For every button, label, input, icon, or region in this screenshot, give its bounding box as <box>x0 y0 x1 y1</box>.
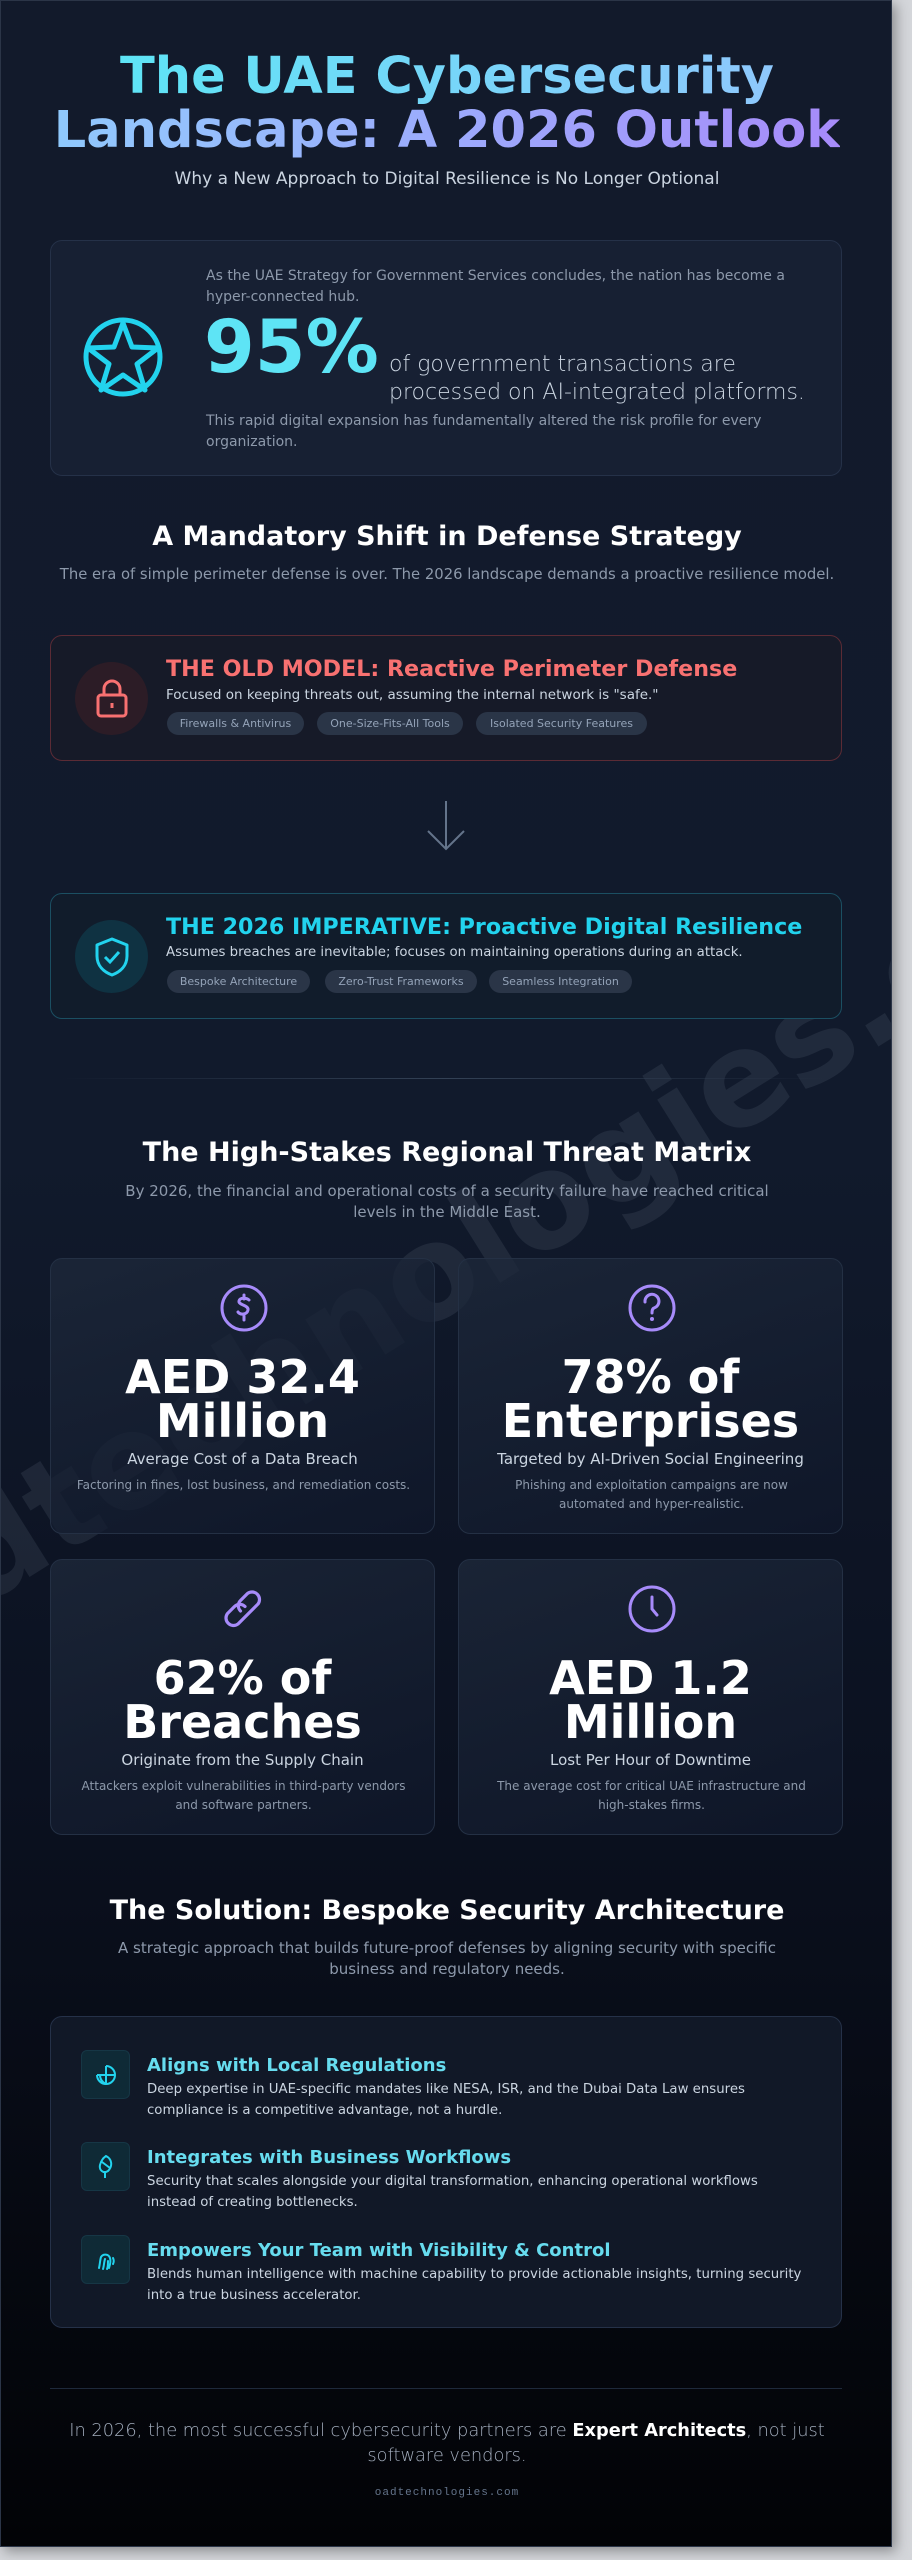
icon: dollar <box>220 1284 268 1332</box>
subheading: A strategic approach that builds future-proof defenses by aligning security with specific business and regulatory needs. <box>118 1939 776 1978</box>
tags: Isolated Security Features <box>490 717 633 730</box>
icon: link <box>224 1590 262 1628</box>
label: Targeted by AI-Driven Social Engineering <box>497 1450 804 1468</box>
old model desc: Focused on keeping threats out, assuming the internal network is "safe." <box>166 687 659 703</box>
item: workflows: Security that scales alongside your digital transformation, enhancing operational workflows instead of creating bottlenecks. <box>147 2174 758 2210</box>
stat description: of government transactions are processed on AI-integrated platforms. <box>389 352 805 405</box>
icon: compliance <box>81 2050 130 2099</box>
heading: threat matrix: The High-Stakes Regional Threat Matrix <box>143 1137 751 1168</box>
heading: solution: The Solution: Bespoke Security Architecture <box>110 1895 784 1926</box>
number: Million <box>564 1695 737 1749</box>
label: Originate from the Supply Chain <box>121 1751 364 1769</box>
panel: 2026 imperative <box>50 893 842 1019</box>
heading: mandatory shift: A Mandatory Shift in Defense Strategy <box>152 521 742 552</box>
stat card: supply chain <box>50 1559 435 1835</box>
footer statement: In 2026, the most successful cybersecurity partners are Expert Architects, not just software vendors. <box>69 2420 825 2466</box>
tags: Seamless Integration <box>502 975 619 988</box>
arrow: down <box>427 801 465 850</box>
title: The UAE Cybersecurity <box>120 47 774 106</box>
tags: One-Size-Fits-All Tools <box>330 717 450 730</box>
old model title: THE OLD MODEL: Reactive Perimeter Defense <box>166 656 737 682</box>
subheading: By 2026, the financial and operational costs of a security failure have reached critical levels in the Middle East. <box>125 1182 769 1221</box>
number: Million <box>156 1394 329 1448</box>
item: regulations: Deep expertise in UAE-specific mandates like NESA, ISR, and the Dubai Data Law ensures compliance is a competitive advantage, not a hurdle. <box>147 2082 745 2118</box>
number: Enterprises <box>502 1394 799 1448</box>
follow text: This rapid digital expansion has fundamentally altered the risk profile for every organization. <box>206 413 761 450</box>
detail: Attackers exploit vulnerabilities in third-party vendors and software partners. <box>82 1779 405 1812</box>
icon: shield <box>75 920 148 993</box>
number <box>549 1651 752 1749</box>
number: 78% of <box>562 1350 739 1404</box>
number <box>502 1350 799 1448</box>
icon: clock <box>628 1586 676 1632</box>
item: visibility: Empowers Your Team with Visibility & Control <box>147 2240 610 2261</box>
icon: fingerprint <box>81 2235 130 2284</box>
title: Landscape: A 2026 Outlook <box>54 101 840 160</box>
number: 62% of <box>154 1651 331 1705</box>
item: visibility <box>81 2235 801 2303</box>
number <box>125 1350 360 1448</box>
label: Lost Per Hour of Downtime <box>550 1751 751 1769</box>
icon: lock <box>75 662 148 735</box>
stat card: breach cost <box>50 1258 435 1534</box>
detail: The average cost for critical UAE infrastructure and high-stakes firms. <box>497 1779 806 1812</box>
label: Average Cost of a Data Breach <box>127 1450 358 1468</box>
stat card: downtime <box>458 1559 843 1835</box>
subheading: The era of simple perimeter defense is over. The 2026 landscape demands a proactive resilience model. <box>60 566 834 583</box>
panel: solution list <box>50 2016 842 2328</box>
icon: question <box>628 1284 676 1332</box>
imperative desc: Assumes breaches are inevitable; focuses on maintaining operations during an attack. <box>166 945 743 960</box>
item: workflows: Integrates with Business Workflows <box>147 2147 511 2168</box>
panel: 95% stat <box>50 240 842 476</box>
icon: star badge <box>84 318 162 396</box>
item: regulations <box>81 2050 745 2118</box>
panel: old model <box>50 635 842 761</box>
item: regulations: Aligns with Local Regulations <box>147 2055 446 2076</box>
icon: leaf <box>81 2142 130 2191</box>
stat card: social engineering <box>458 1258 843 1534</box>
number: Breaches <box>123 1695 362 1749</box>
subtitle: Why a New Approach to Digital Resilience is No Longer Optional <box>175 169 719 189</box>
tags: Bespoke Architecture <box>180 975 297 988</box>
number <box>123 1651 362 1749</box>
intro text: As the UAE Strategy for Government Services concludes, the nation has become a hyper-connected hub. <box>206 268 785 305</box>
footer url: oadtechnologies.com <box>375 2487 519 2499</box>
item: visibility: Blends human intelligence with machine capability to provide actionable insights, turning security into a true business accelerator. <box>147 2267 801 2303</box>
number: AED 1.2 <box>549 1651 752 1705</box>
tags: Zero-Trust Frameworks <box>338 975 464 988</box>
title <box>54 47 840 160</box>
detail: Factoring in fines, lost business, and remediation costs. <box>77 1478 410 1492</box>
tags <box>167 970 632 993</box>
item: workflows <box>81 2142 758 2210</box>
detail: Phishing and exploitation campaigns are now automated and hyper-realistic. <box>515 1478 788 1511</box>
number: AED 32.4 <box>125 1350 360 1404</box>
tags <box>167 712 647 735</box>
big number: 95% <box>204 305 379 390</box>
imperative title: THE 2026 IMPERATIVE: Proactive Digital Resilience <box>166 914 802 940</box>
tags: Firewalls & Antivirus <box>180 717 291 730</box>
